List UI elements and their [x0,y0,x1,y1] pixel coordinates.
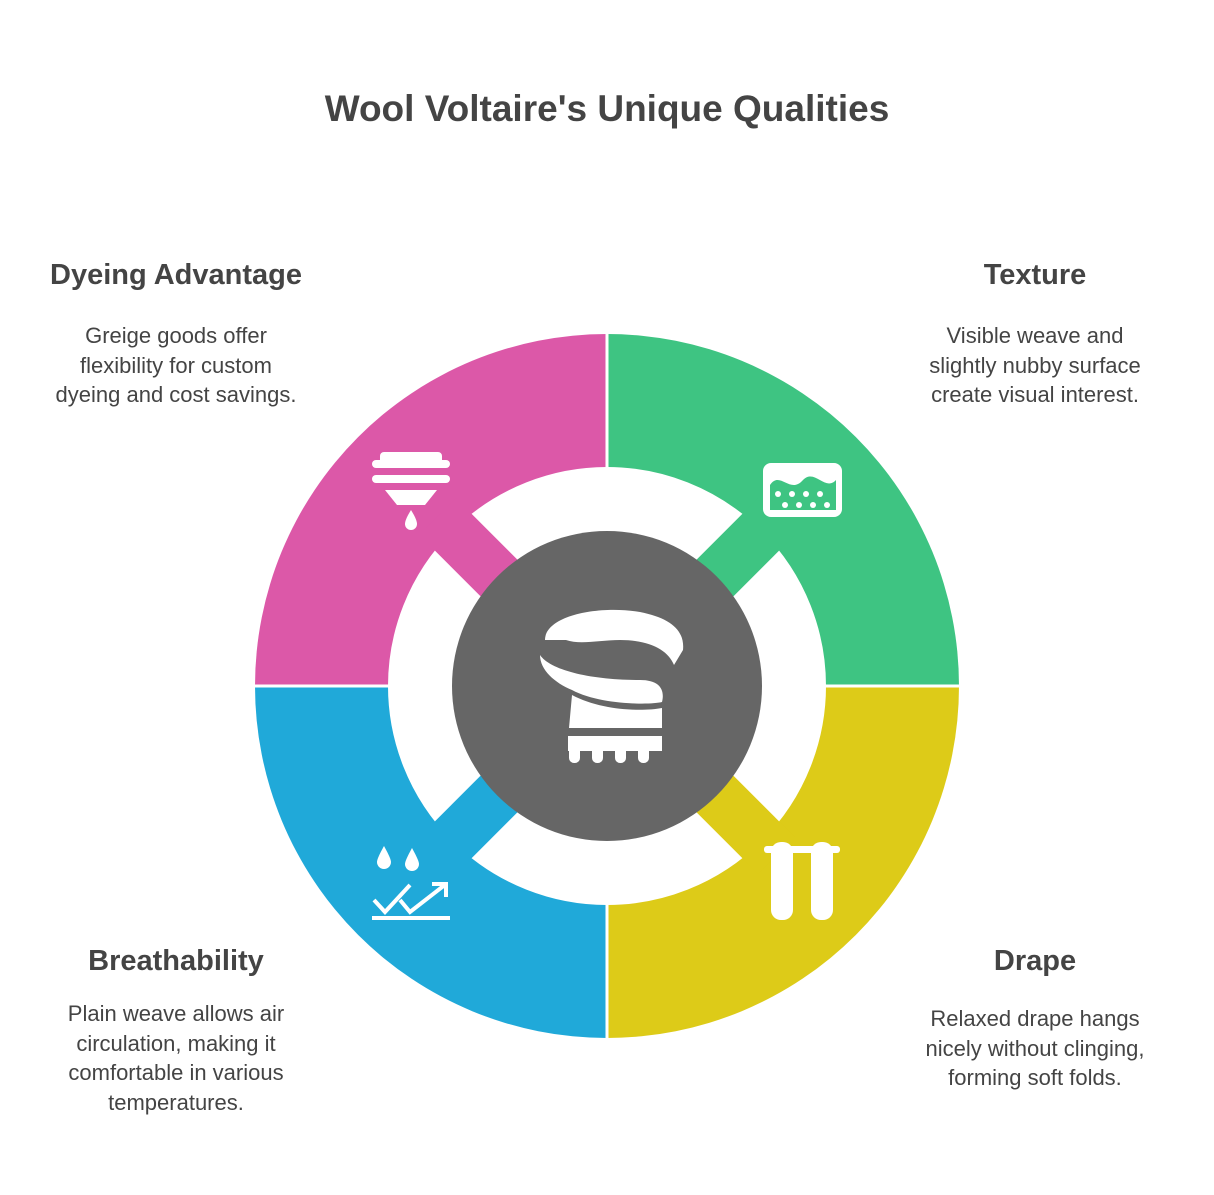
icon: drape [764,842,840,920]
title: Wool Voltaire's Unique Qualities [325,88,889,129]
center circle [452,531,762,841]
text: drape: Relaxed drape hangs [930,1006,1140,1031]
text: breathability: temperatures. [108,1090,244,1114]
text: breathability: comfortable in various [68,1060,284,1085]
text: dyeing advantage [50,259,302,407]
text: texture: slightly nubby surface [929,352,1141,378]
text: texture: Texture [984,259,1086,291]
icon: scarf [540,610,683,763]
text: dyeing advantage: flexibility for custom [80,352,272,378]
text: texture: Visible weave and [947,323,1123,348]
text: dyeing advantage: Greige goods offer [85,323,267,348]
text: texture [929,259,1141,407]
icon: breathability [372,846,450,918]
segment: breathability [255,686,607,1038]
icon: texture [763,463,842,517]
text: breathability [68,945,284,1114]
segment: drape [607,686,959,1038]
text: drape [926,945,1144,1090]
icon: dye vat [372,452,450,530]
text: drape: nicely without clinging, [926,1036,1144,1060]
text: drape: Drape [994,945,1076,977]
text: dyeing advantage: Dyeing Advantage [50,259,302,291]
text: breathability: Breathability [88,945,264,977]
text: dyeing advantage: dyeing and cost savings. [56,382,296,407]
text: breathability: Plain weave allows air [68,1001,284,1026]
text: breathability: circulation, making it [76,1030,276,1056]
segment: dyeing [255,334,607,686]
text: drape: forming soft folds. [948,1065,1122,1090]
text: texture: create visual interest. [931,382,1139,407]
segment: texture [607,334,959,686]
